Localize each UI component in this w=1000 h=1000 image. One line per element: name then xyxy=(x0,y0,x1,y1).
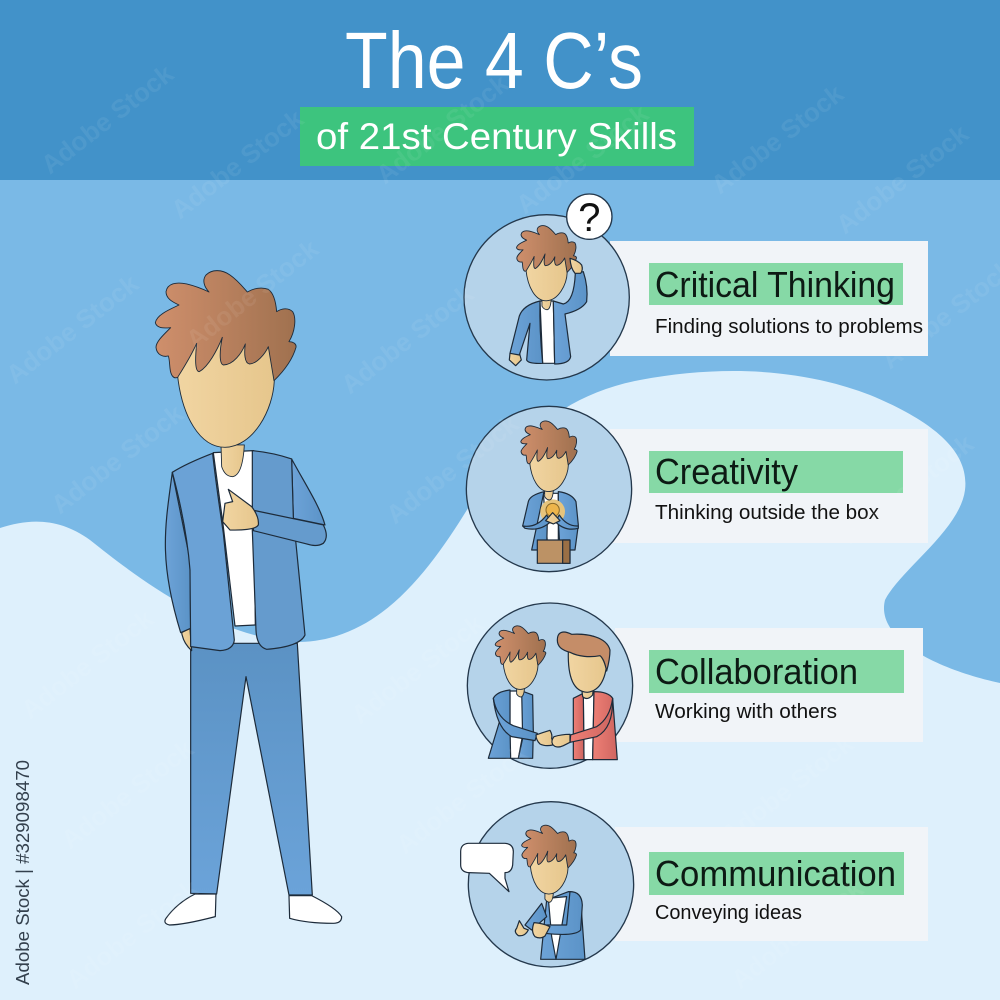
heading: Communication xyxy=(655,853,896,894)
watermark: Adobe Stock xyxy=(345,608,489,730)
label xyxy=(649,650,904,693)
second person's head xyxy=(557,632,610,698)
card xyxy=(615,628,923,742)
watermark: Adobe Stock xyxy=(335,278,479,400)
subtitle: of 21st Century Skills xyxy=(316,116,677,157)
card xyxy=(610,241,928,356)
watermark: Adobe Stock xyxy=(380,408,524,530)
icon: box xyxy=(537,540,570,563)
heading: Collaboration xyxy=(655,651,858,692)
description: Working with others xyxy=(655,701,837,723)
subtitle xyxy=(300,107,694,166)
heading: Creativity xyxy=(655,451,798,492)
watermark: Adobe Stock xyxy=(35,58,179,180)
watermark: Adobe Stock xyxy=(60,873,204,995)
panel: collaboration xyxy=(467,603,923,768)
icon: creative person with box xyxy=(466,406,632,572)
panel: creativity xyxy=(466,406,928,572)
watermark: Adobe Stock xyxy=(510,98,654,220)
card xyxy=(610,429,928,543)
watermark: Adobe Stock xyxy=(725,873,869,995)
icon: speaking person xyxy=(461,802,634,967)
shoes xyxy=(165,894,342,925)
label xyxy=(649,263,903,305)
label xyxy=(649,852,904,895)
watermark: Adobe Stock xyxy=(55,733,199,855)
panel: communication xyxy=(461,802,928,967)
watermark: Adobe Stock xyxy=(705,78,849,200)
description: Thinking outside the box xyxy=(655,502,879,524)
icon: two people shaking hands xyxy=(467,603,633,768)
icon: thinking person xyxy=(464,194,629,380)
watermark: Adobe Stock xyxy=(390,738,534,860)
pants xyxy=(191,643,312,895)
header band xyxy=(0,0,1000,180)
watermark: Adobe Stock xyxy=(715,728,859,850)
watermark: Adobe Stock xyxy=(370,68,514,190)
icon: question bubble: ? xyxy=(578,196,600,240)
title: The 4 C’s xyxy=(345,16,643,105)
label xyxy=(649,451,903,493)
background wave xyxy=(0,371,1000,1000)
description: Finding solutions to problems xyxy=(655,316,923,338)
watermark: Adobe Stock xyxy=(830,118,974,240)
icon: speech bubble xyxy=(461,843,513,892)
icon: question bubble xyxy=(567,194,612,240)
heading: Critical Thinking xyxy=(655,264,895,305)
stock id: Adobe Stock | #329098470 xyxy=(13,760,33,985)
watermark: Adobe Stock xyxy=(180,233,324,355)
watermark: Adobe Stock xyxy=(165,103,309,225)
watermark: Adobe Stock xyxy=(45,398,189,520)
watermark: Adobe Stock xyxy=(0,268,144,390)
watermark: Adobe Stock xyxy=(835,428,979,550)
panel: critical thinking xyxy=(464,194,928,380)
card xyxy=(615,827,928,941)
description: Conveying ideas xyxy=(655,902,802,924)
upper body xyxy=(155,271,326,651)
main figure xyxy=(155,271,342,925)
watermark: Adobe Stock xyxy=(15,603,159,725)
